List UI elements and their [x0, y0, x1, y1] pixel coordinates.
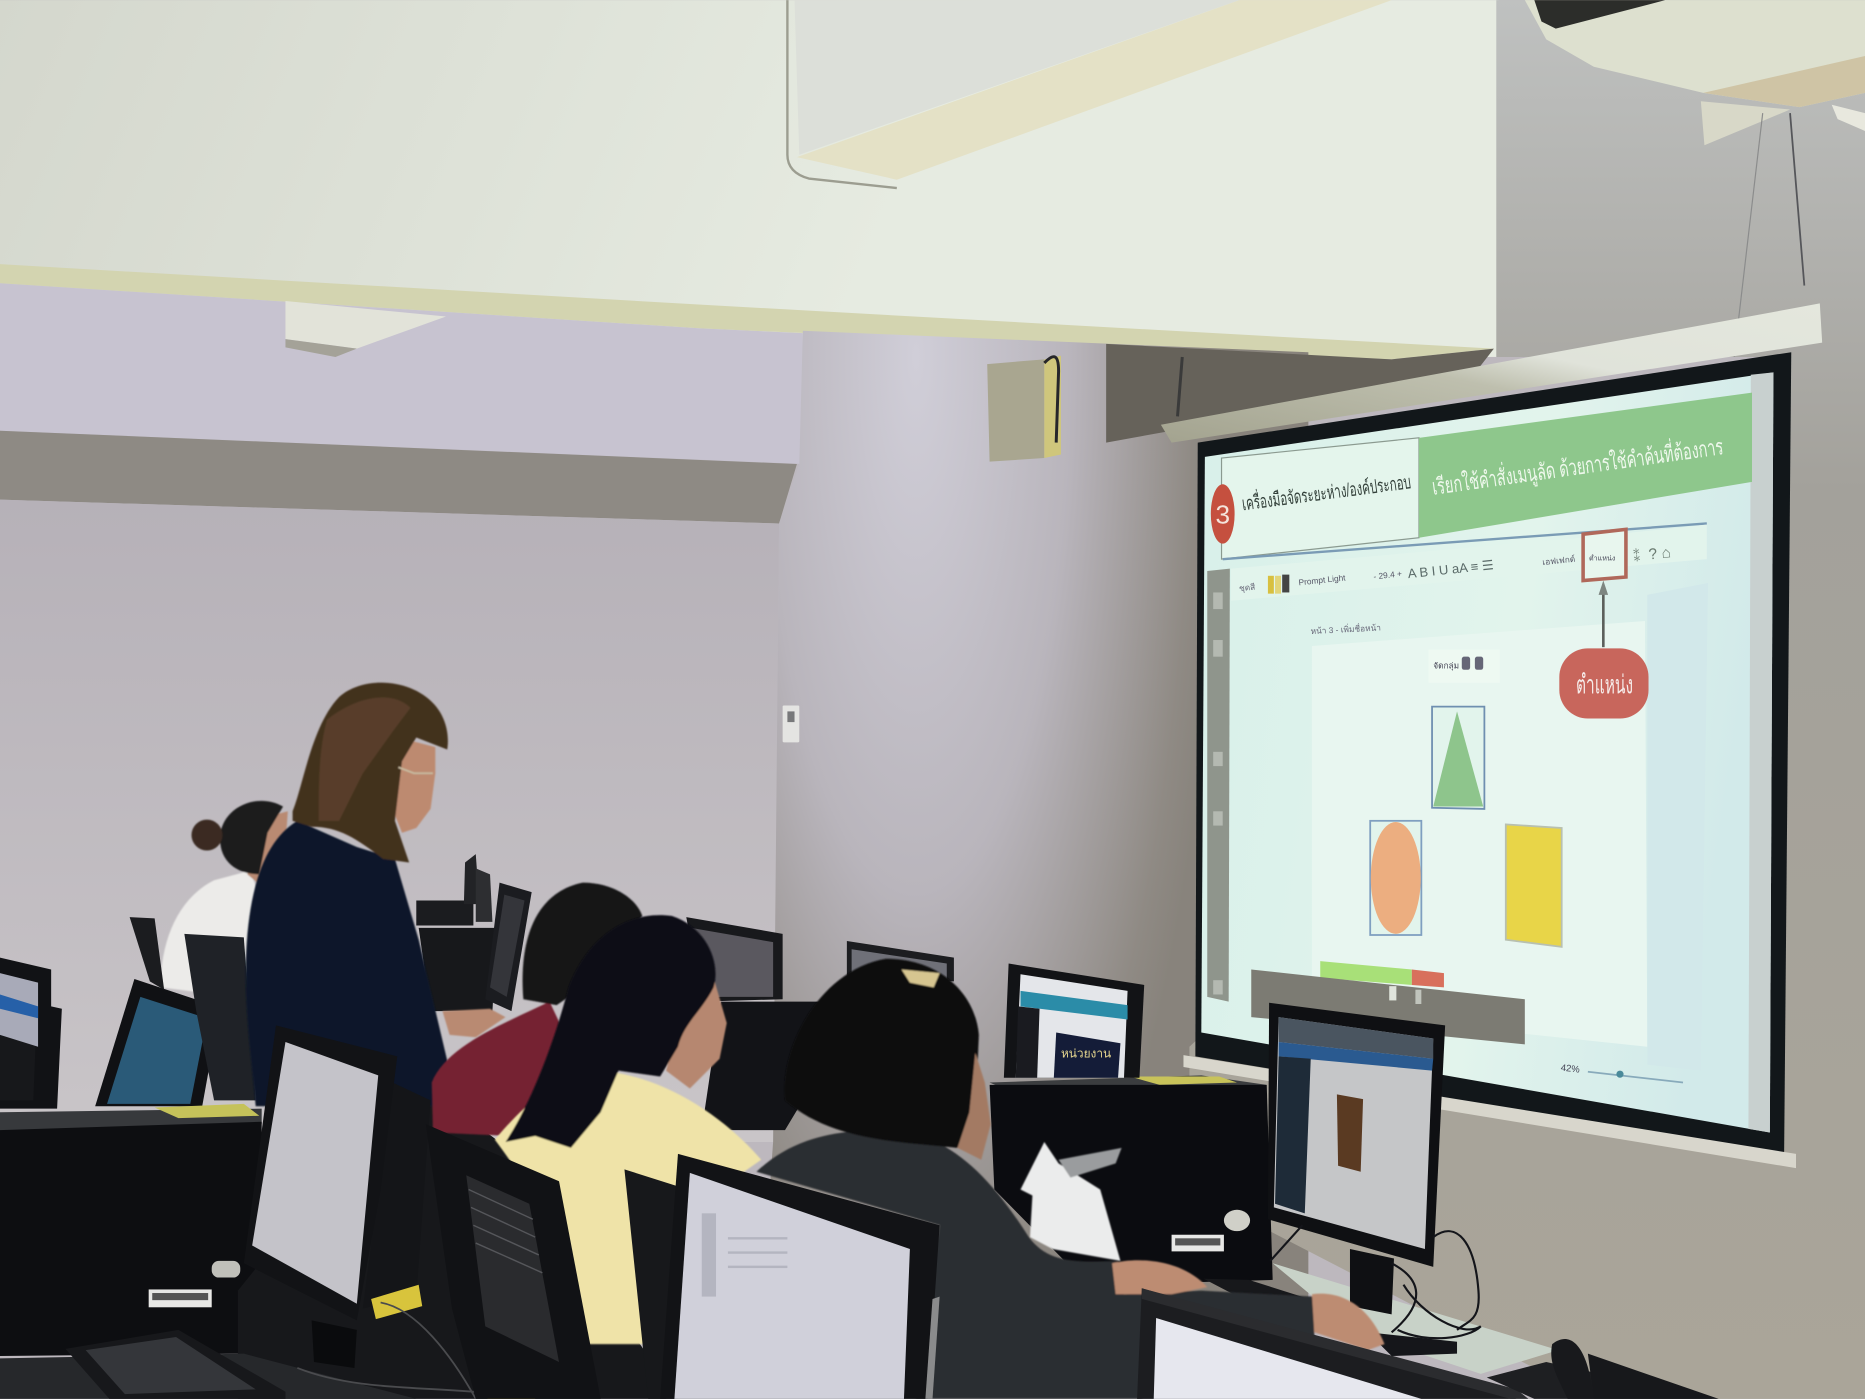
front student: [756, 959, 1384, 1399]
editor toolbar: - 29.4 +: [1373, 568, 1402, 581]
slide heading box: [1222, 438, 1419, 559]
number badge: 3: [1215, 499, 1230, 529]
hair: [784, 959, 979, 1148]
screen mount: [1178, 357, 1182, 416]
cables left: [297, 1303, 500, 1399]
keyboard right and mouse: [1204, 1279, 1457, 1356]
student in maroon: [432, 883, 642, 1136]
editor toolbar: ชุดสี: [1239, 582, 1256, 594]
standing teacher: [246, 683, 450, 1106]
number badge: [1211, 484, 1235, 544]
projector screen: [1161, 303, 1822, 1168]
office chair: [426, 1124, 601, 1399]
barcode label: [149, 1289, 212, 1307]
page status bar: [1320, 961, 1444, 987]
wall: upper ceiling beam: [0, 0, 1499, 359]
monitor screen: [1274, 1017, 1433, 1249]
element toolbar: [1428, 650, 1500, 683]
desk surface right: [1273, 1263, 1558, 1374]
editor toolbar: [1231, 525, 1707, 601]
chair centre: [624, 1169, 680, 1399]
projected slide: [1201, 372, 1773, 1132]
teacher glasses: [398, 767, 433, 773]
teacher face: [393, 738, 435, 833]
cables right: [1270, 1225, 1481, 1338]
back monitor centre: [686, 917, 783, 1002]
left hand: [1112, 1260, 1207, 1294]
white bag: [1021, 1142, 1122, 1261]
arrow: [1599, 581, 1608, 647]
monitor stand: [1350, 1249, 1394, 1314]
thermostat: [783, 705, 799, 742]
far desks and monitors: [416, 854, 532, 1011]
monitor right front: [1268, 1003, 1445, 1314]
wall: left wall: [0, 283, 803, 1142]
desk surface left: [0, 1354, 416, 1399]
editor toolbar: ⁑ ? ⌂: [1628, 544, 1672, 566]
position highlight box: ตำแหน่ง: [1589, 554, 1615, 562]
position highlight box: [1583, 529, 1626, 581]
screen frame: [1195, 352, 1791, 1154]
far left desk computer: [0, 1104, 262, 1356]
wall speaker: [987, 356, 1061, 462]
background student in white: [161, 801, 288, 999]
left tool panel: [1207, 569, 1230, 1002]
yellow sticker lower: [482, 1380, 535, 1399]
page label: หน้า 3 - เพิ่มชื่อหน้า: [1310, 621, 1381, 636]
screen bottom bar: [1183, 1055, 1796, 1168]
green banner: [1419, 393, 1752, 538]
left monitor blue screen: [95, 979, 220, 1106]
teacher hair: [293, 683, 448, 862]
hair clip: [902, 969, 940, 987]
presentation toolbar: [1251, 969, 1525, 1044]
student in yellow: [495, 915, 761, 1344]
monitor right with poster: [1004, 964, 1144, 1078]
yellow student hair: [506, 915, 716, 1148]
zoom level: [1560, 1063, 1683, 1082]
back desk: [702, 1002, 823, 1130]
slide divider: [1223, 523, 1707, 559]
yellow sticker: [371, 1285, 422, 1319]
monitor right with poster: หน่วยงาน: [1061, 1047, 1111, 1061]
bottom right monitor: [1137, 1288, 1528, 1399]
slide heading: เครื่องมือจัดระยะห่าง/องค์ประกอบ: [1240, 468, 1412, 515]
shadow wedge above screen: [1106, 344, 1494, 443]
monitor frame: [1268, 1003, 1445, 1267]
square shape: [1506, 824, 1562, 947]
front left monitor: [244, 1025, 431, 1368]
desktop tower: [990, 1075, 1273, 1282]
position pill: ตำแหน่ง: [1576, 670, 1633, 700]
far left monitor: [0, 958, 62, 1109]
zoom level: 42%: [1560, 1063, 1581, 1076]
wall: centre wall: [761, 331, 1308, 1308]
canvas page: [1312, 621, 1647, 1047]
back monitor right: [847, 941, 954, 981]
empty chair back: [130, 917, 256, 1100]
design thumbnail: [1337, 1094, 1363, 1172]
editor toolbar: เอฟเฟกต์: [1542, 554, 1576, 567]
element toolbar: จัดกลุ่ม: [1433, 661, 1459, 672]
yellow blouse: [495, 1071, 761, 1344]
right hand: [1312, 1294, 1384, 1350]
editor toolbar: Prompt Light: [1298, 572, 1347, 587]
teacher coat: [246, 821, 450, 1106]
editor toolbar: A B I U aA ≡ ☰: [1407, 557, 1494, 581]
keyboard: [65, 1330, 285, 1399]
wall: right wall: [1189, 0, 1865, 1399]
position pill: [1559, 648, 1649, 719]
screen housing: [1161, 303, 1822, 443]
chair bottom right: [1487, 1339, 1719, 1399]
air conditioner: [1525, 0, 1865, 357]
dark furniture under front desks: [238, 1077, 678, 1399]
ceiling: protruding beam: [787, 0, 1392, 188]
circle shape: [1370, 821, 1421, 935]
face: [957, 1053, 991, 1160]
front centre monitor: [660, 1154, 940, 1399]
yellow student face: [666, 978, 727, 1088]
triangle shape: [1432, 707, 1484, 809]
dark jacket: [756, 1130, 1314, 1399]
